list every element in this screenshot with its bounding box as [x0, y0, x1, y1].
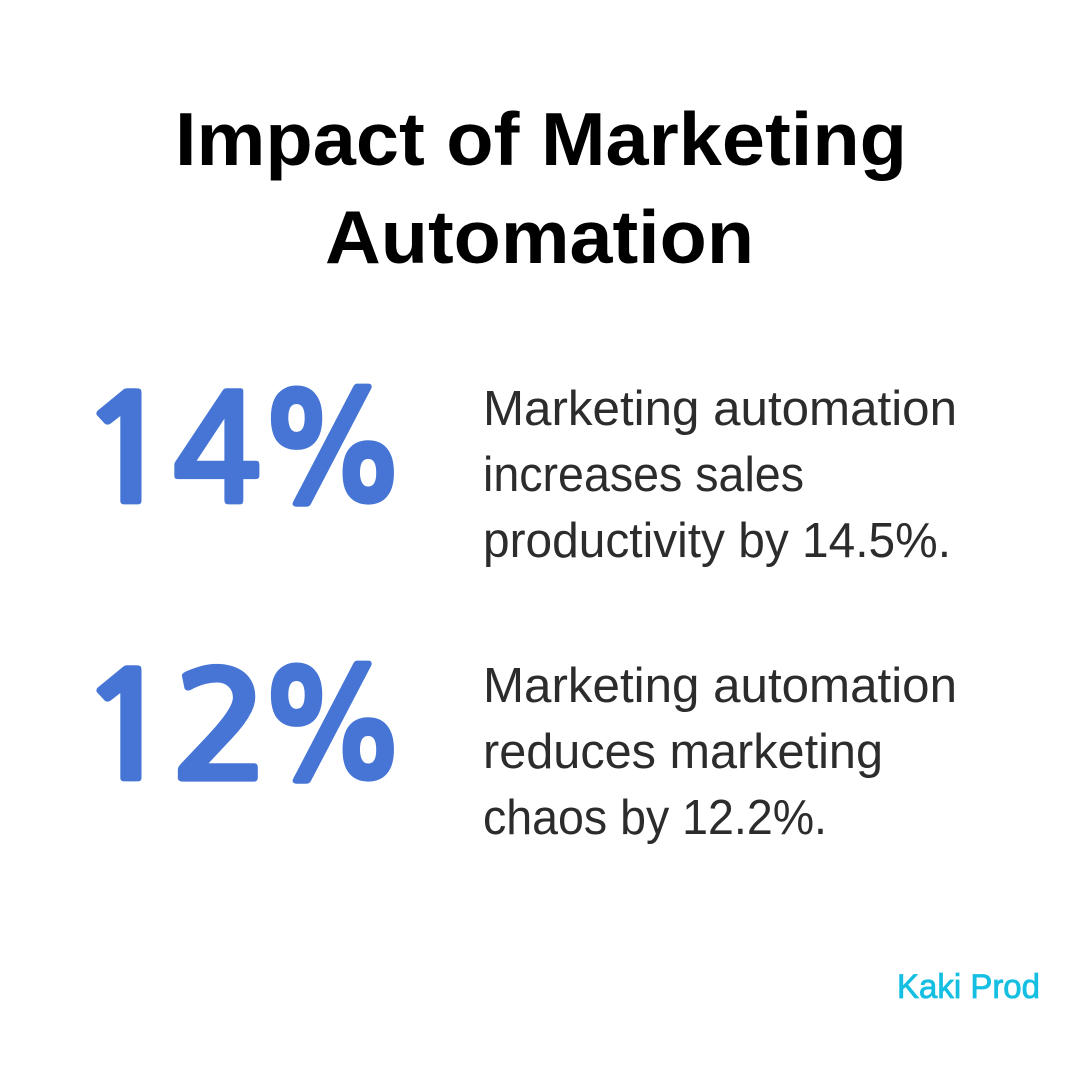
text block: marketing chaos: [483, 659, 957, 845]
title: Automation: [325, 195, 754, 279]
logo: Kaki Prod: Kaki Prod: [897, 968, 1040, 1006]
text block: marketing chaos: reduces marketing: [483, 725, 883, 779]
text block: sales productivity: productivity by 14.5%.: [483, 514, 951, 568]
big number: 14%: %: [257, 378, 408, 525]
big number: 14%: [77, 377, 408, 526]
big number: 12%: 2: [170, 654, 271, 802]
title: [175, 97, 907, 279]
big number: 14%: 4: [172, 378, 262, 526]
text block: sales productivity: increases sales: [483, 448, 804, 502]
big number: 12%: %: [257, 655, 408, 802]
panel: stat 12%: [77, 654, 957, 845]
panel: stat 14%: [77, 377, 957, 568]
big number: 14%: 1: [77, 377, 178, 525]
big number: 12%: [77, 654, 408, 802]
text block: marketing chaos: Marketing automation: [483, 659, 957, 713]
big number: 12%: 1: [77, 654, 178, 802]
text block: marketing chaos: chaos by 12.2%.: [483, 791, 827, 845]
title: Impact of Marketing: [175, 97, 907, 181]
text block: sales productivity: Marketing automation: [483, 382, 957, 436]
text block: sales productivity: [483, 382, 957, 568]
